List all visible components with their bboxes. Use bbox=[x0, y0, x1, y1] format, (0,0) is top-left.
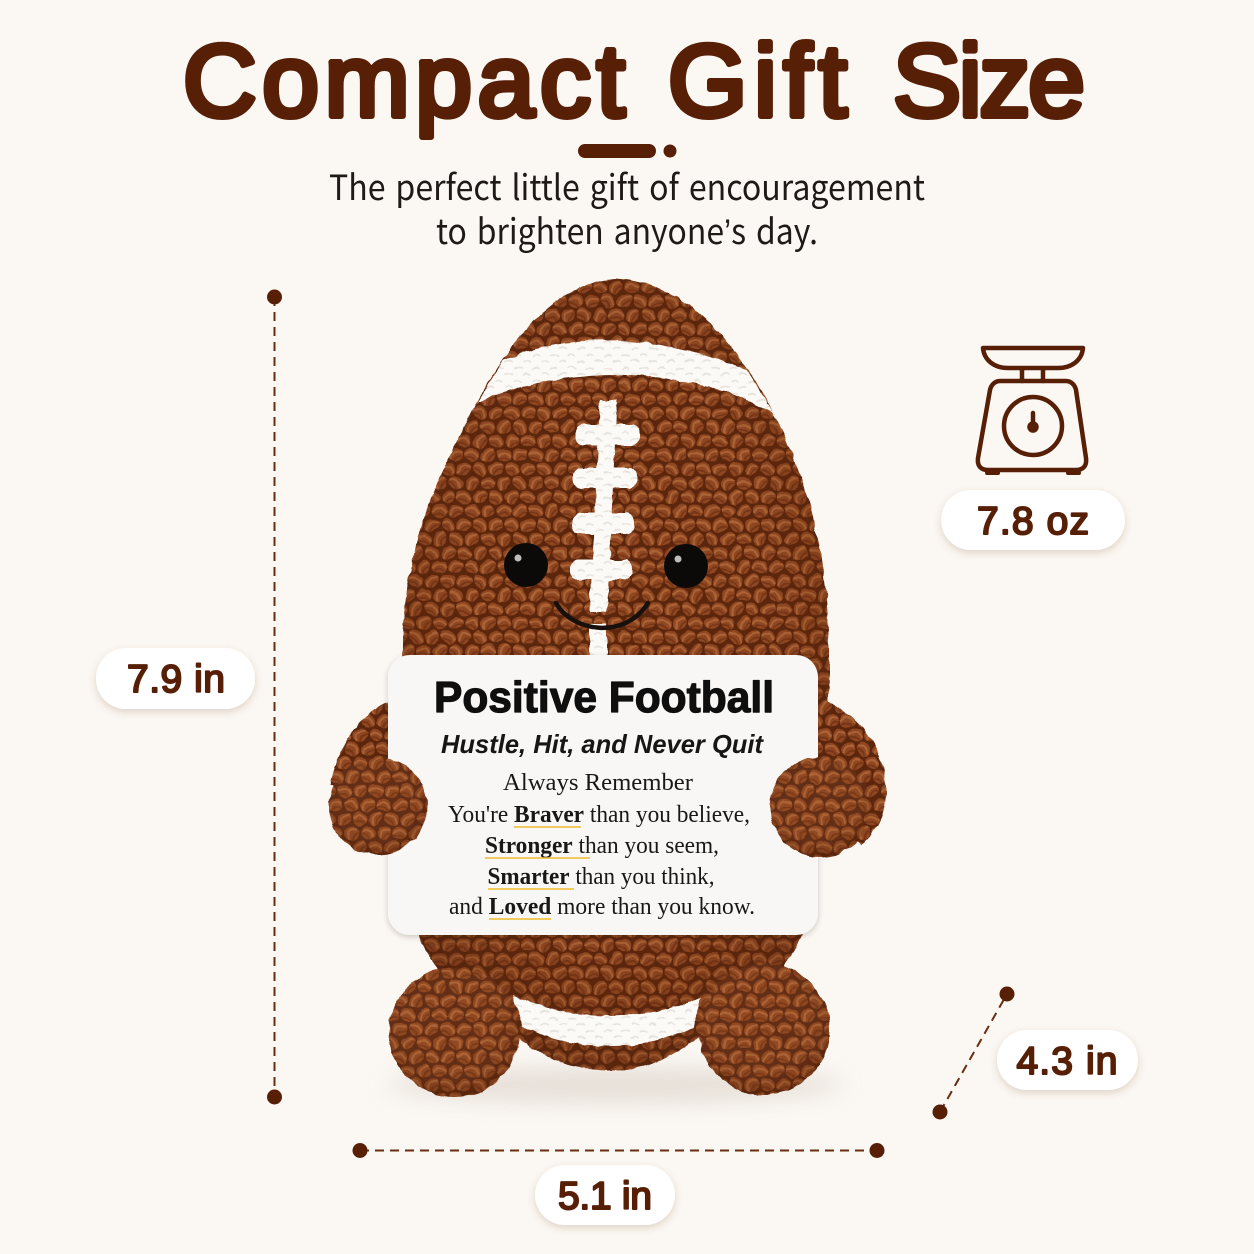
highlighted word underlines bbox=[485, 827, 590, 919]
subtitle: The perfect little gift of encouragement bbox=[329, 160, 925, 211]
label: weight: 7.8 oz bbox=[977, 500, 1089, 543]
card message: Smarter than you think, bbox=[488, 864, 714, 890]
title accent: dash and dot bbox=[578, 144, 676, 158]
right hand bbox=[770, 757, 870, 857]
card tagline: Hustle, Hit, and Never Quit bbox=[441, 729, 764, 759]
right arm bbox=[816, 698, 886, 845]
icon: kitchen scale bbox=[978, 348, 1086, 473]
label: width: 5.1 in bbox=[558, 1175, 652, 1218]
card message bbox=[448, 770, 755, 920]
plush football bbox=[330, 278, 886, 1097]
ground shadow bbox=[385, 1067, 845, 1103]
left arm bbox=[330, 702, 392, 790]
eyes bbox=[504, 543, 708, 588]
top white stripe bbox=[478, 340, 773, 413]
card heading: Positive Football bbox=[434, 673, 774, 722]
title bbox=[183, 24, 1085, 138]
card message: and Loved more than you know. bbox=[449, 894, 755, 920]
left hand bbox=[329, 757, 427, 855]
height dimension line bbox=[267, 290, 282, 1104]
label: depth: 4.3 in bbox=[1016, 1040, 1118, 1083]
subtitle bbox=[329, 160, 925, 255]
label: width bbox=[535, 1165, 675, 1225]
laces bbox=[570, 400, 640, 656]
label: depth bbox=[997, 1030, 1138, 1090]
title: Compact bbox=[183, 24, 625, 138]
title: Gift bbox=[668, 24, 847, 138]
label: weight bbox=[941, 490, 1125, 550]
title: Size bbox=[893, 24, 1085, 138]
message card bbox=[388, 655, 818, 935]
football body and stitching bbox=[330, 278, 886, 1097]
label: height: 7.9 in bbox=[127, 658, 225, 701]
right foot bbox=[698, 963, 830, 1095]
bottom white stripe bbox=[512, 995, 700, 1046]
left foot bbox=[389, 967, 519, 1097]
subtitle: to brighten anyone’s day. bbox=[436, 204, 818, 255]
smile bbox=[556, 603, 648, 628]
card message: Always Remember bbox=[503, 770, 693, 796]
depth dimension line bbox=[932, 986, 1014, 1120]
card message: You're Braver than you believe, bbox=[448, 802, 750, 828]
card message: Stronger than you seem, bbox=[485, 833, 719, 859]
width dimension line bbox=[352, 1143, 884, 1158]
label: height bbox=[96, 648, 255, 709]
